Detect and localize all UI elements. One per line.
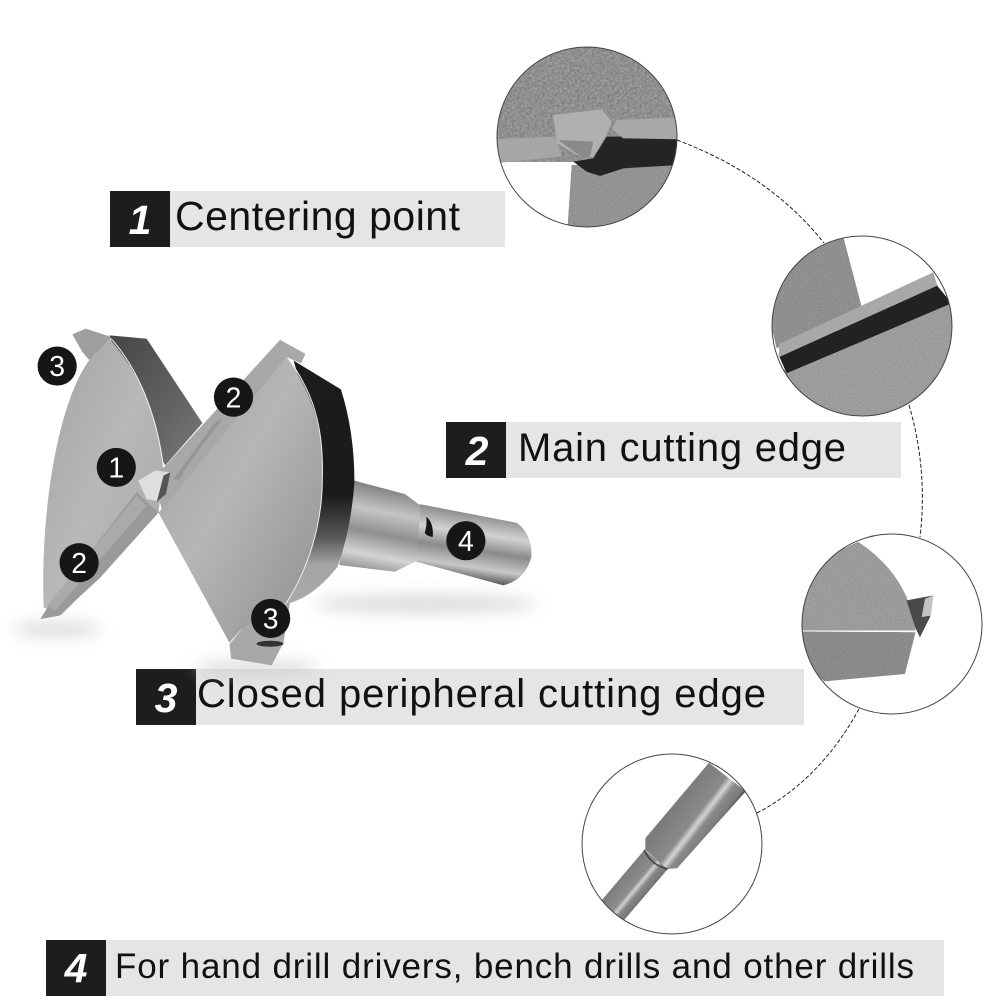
detail circle 4: shank close-up bbox=[580, 750, 770, 940]
drill bit illustration: 2 bbox=[226, 382, 241, 414]
shadows bbox=[13, 594, 537, 676]
white seam left bbox=[111, 339, 164, 469]
label 3: closed peripheral cutting edge bbox=[136, 669, 804, 725]
drill bit illustration: 3 bbox=[263, 604, 279, 636]
label 4: compatible drills: 4 bbox=[64, 945, 88, 991]
label 3: closed peripheral cutting edge: Closed peripheral cutting edge bbox=[197, 672, 766, 716]
detail circle 1: centering point close-up bbox=[496, 46, 678, 228]
detail circle 2: main cutting edge close-up bbox=[772, 236, 952, 416]
label 4: compatible drills bbox=[46, 940, 944, 996]
centering point bbox=[138, 470, 170, 501]
label 2: main cutting edge: Main cutting edge bbox=[518, 426, 846, 470]
drill bit illustration bbox=[13, 329, 537, 676]
number badges bbox=[38, 346, 485, 638]
label 2: main cutting edge bbox=[446, 422, 901, 478]
drill bit illustration: 3 bbox=[49, 351, 65, 383]
left blade face bbox=[43, 339, 164, 616]
label 1: centering point: Centering point bbox=[175, 193, 461, 239]
drill bit illustration: 2 bbox=[71, 548, 87, 580]
label 1: centering point: 1 bbox=[129, 197, 151, 243]
top left tip bbox=[72, 329, 111, 360]
label 2: main cutting edge: 2 bbox=[465, 428, 489, 474]
drill bit illustration: 4 bbox=[458, 526, 474, 558]
dashed connector arcs bbox=[677, 140, 922, 813]
right blade face bbox=[158, 357, 322, 643]
label 3: closed peripheral cutting edge: 3 bbox=[155, 675, 178, 721]
back wing bbox=[110, 335, 202, 465]
bottom tip bbox=[229, 601, 290, 665]
rim of right wing bbox=[287, 361, 354, 604]
main cutting strip bbox=[153, 340, 305, 509]
drill bit illustration: 1 bbox=[108, 453, 124, 485]
label 1: centering point bbox=[110, 191, 505, 247]
white seam right bbox=[287, 359, 322, 602]
detail circle 3: peripheral cutting edge close-up bbox=[802, 534, 982, 714]
label 4: compatible drills: For hand drill drivers, bench drills and other drills bbox=[115, 947, 914, 986]
left cutting strip bbox=[40, 492, 158, 619]
shank bbox=[339, 481, 531, 585]
